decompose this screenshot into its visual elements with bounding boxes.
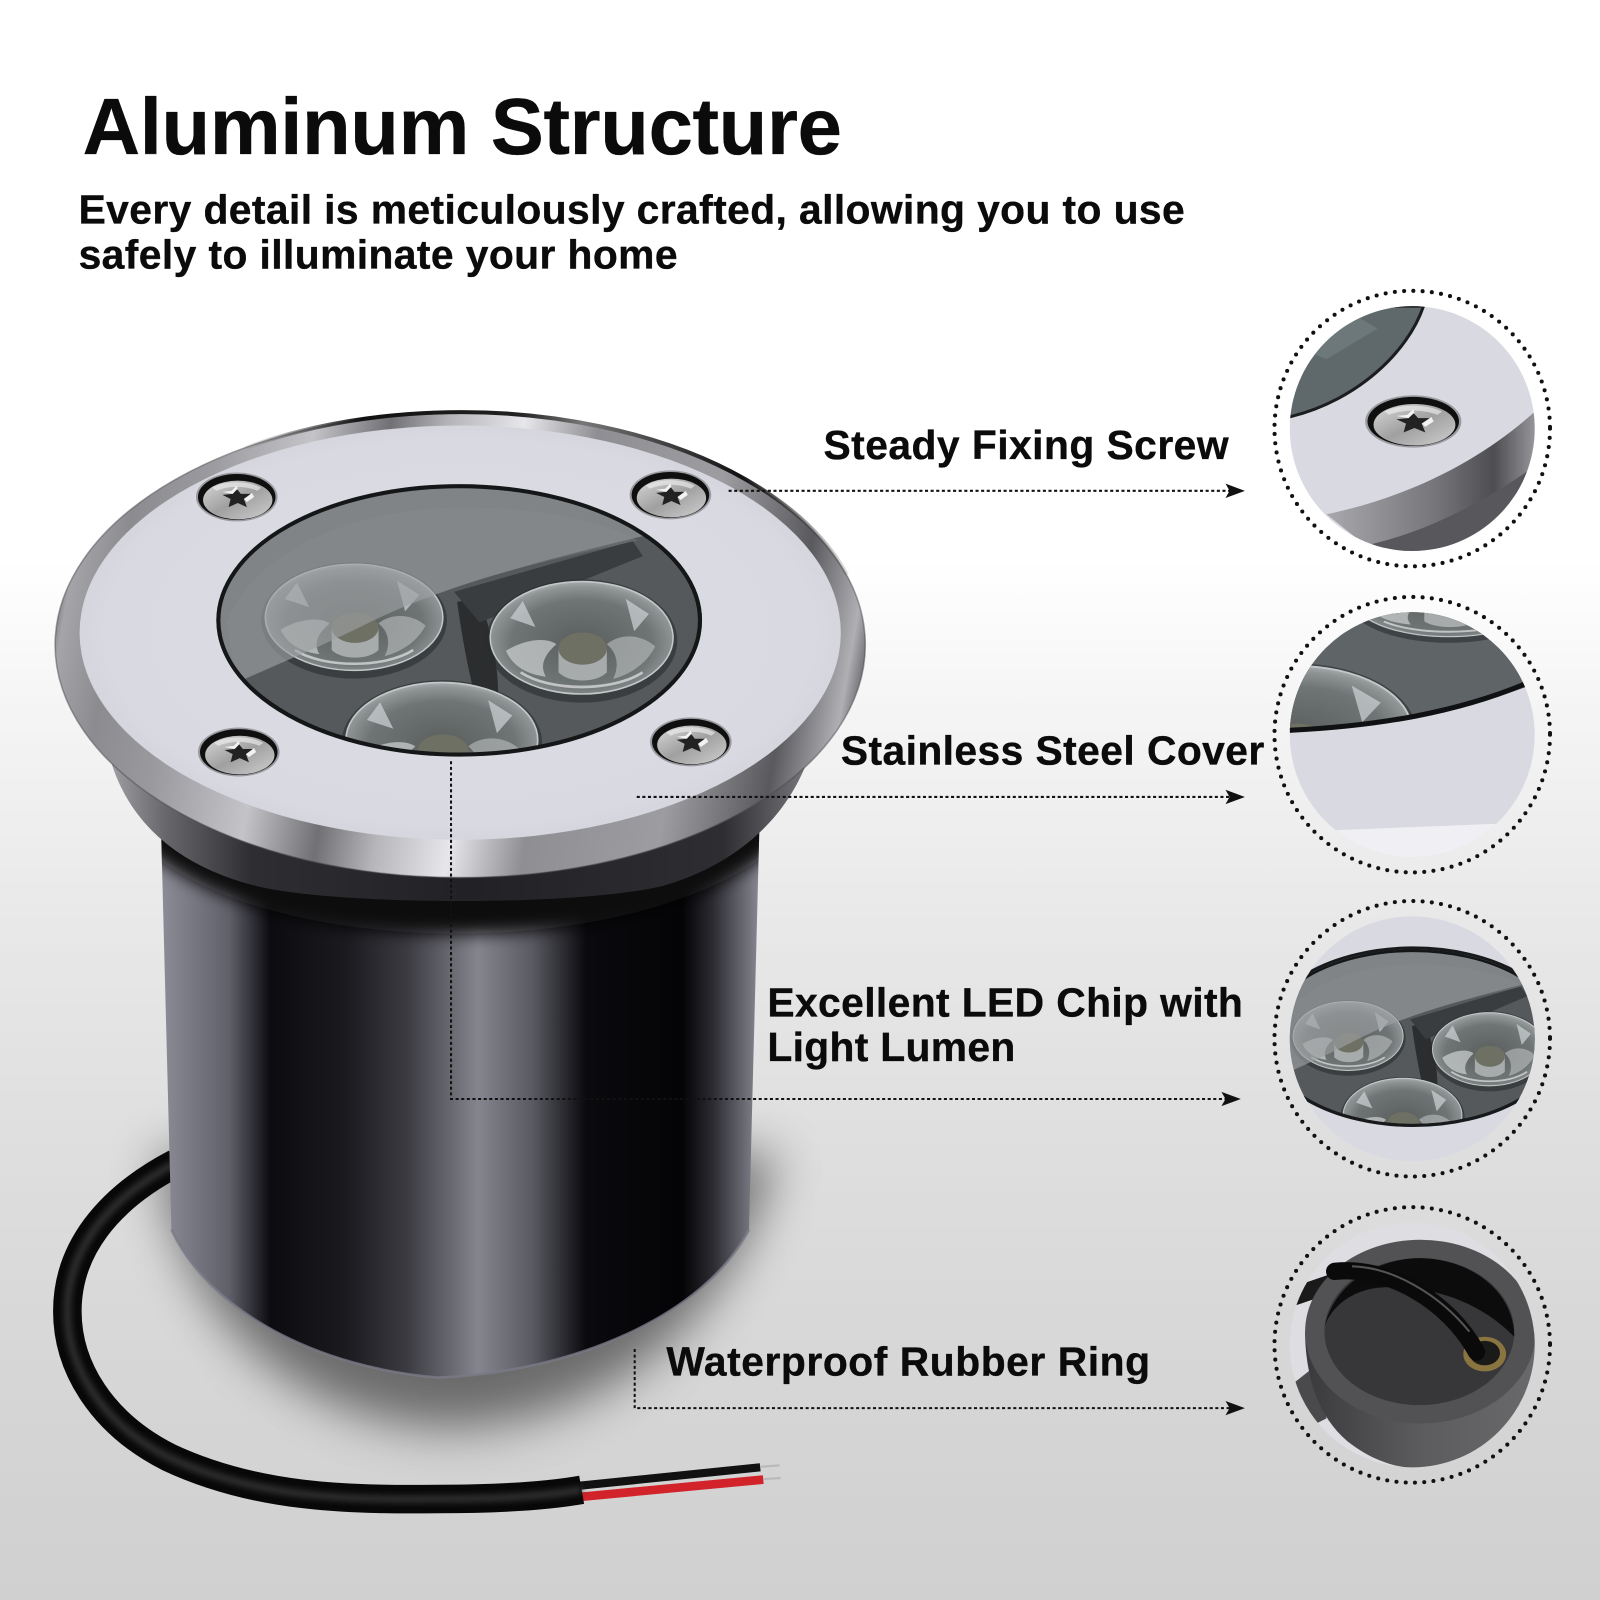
rim top dark edge bbox=[245, 412, 847, 574]
ring interior foam bbox=[1324, 1258, 1514, 1405]
rim band bbox=[1327, 406, 1541, 551]
lens window with three LEDs bbox=[209, 478, 714, 806]
cylinder body bbox=[161, 832, 760, 1379]
cable stub bbox=[1296, 1275, 1328, 1306]
label: LED chip: Excellent LED Chip with bbox=[767, 979, 1243, 1025]
screw: top left bbox=[196, 472, 278, 521]
subtitle bbox=[79, 186, 1185, 277]
lower stub bbox=[1296, 1371, 1326, 1423]
detail circle: screw bbox=[1274, 291, 1550, 571]
screw: bottom left bbox=[198, 728, 280, 777]
subtitle: Every detail is meticulously crafted, allowing you to use bbox=[79, 186, 1185, 232]
flange stainless steel ring bbox=[55, 412, 865, 878]
subtitle: safely to illuminate your home bbox=[79, 231, 678, 277]
callout line: steel cover bbox=[637, 790, 1245, 804]
product: in-ground LED light bbox=[55, 412, 865, 1499]
collar under flange bbox=[104, 730, 816, 901]
stainless steel cover plate bbox=[80, 426, 841, 840]
title: Aluminum Structure bbox=[83, 82, 842, 171]
detail circle: LED chip bbox=[1258, 901, 1571, 1177]
label: steady fixing screw: Steady Fixing Screw bbox=[823, 422, 1229, 468]
callout line: LED chip bbox=[451, 761, 1241, 1106]
screw: bottom right bbox=[650, 717, 732, 766]
outer wall bbox=[1305, 1332, 1536, 1468]
lens portion bbox=[1290, 306, 1425, 418]
polished edge highlight bbox=[1336, 824, 1496, 857]
cable bbox=[67, 1163, 781, 1499]
label: stainless steel cover: Stainless Steel Cover bbox=[841, 727, 1264, 773]
label: rubber ring: Waterproof Rubber Ring bbox=[666, 1339, 1150, 1385]
ground shadow bbox=[158, 1153, 776, 1429]
screw: top right bbox=[630, 470, 711, 519]
rubber ring top bbox=[1305, 1240, 1536, 1423]
detail circle: cover bbox=[1272, 594, 1552, 874]
detail circle: rubber ring bbox=[1265, 1207, 1550, 1483]
label: LED chip: Light Lumen bbox=[767, 1024, 1015, 1070]
lens close-up bbox=[1290, 612, 1526, 730]
callout line: rubber ring bbox=[635, 1349, 1245, 1415]
label: LED chip bbox=[767, 979, 1243, 1070]
stripped wires bbox=[580, 1465, 781, 1497]
inner cable bbox=[1335, 1271, 1477, 1352]
callout line: fixing screw bbox=[729, 484, 1245, 498]
enlarged screw bbox=[1365, 395, 1461, 448]
brass nut bbox=[1463, 1337, 1506, 1371]
